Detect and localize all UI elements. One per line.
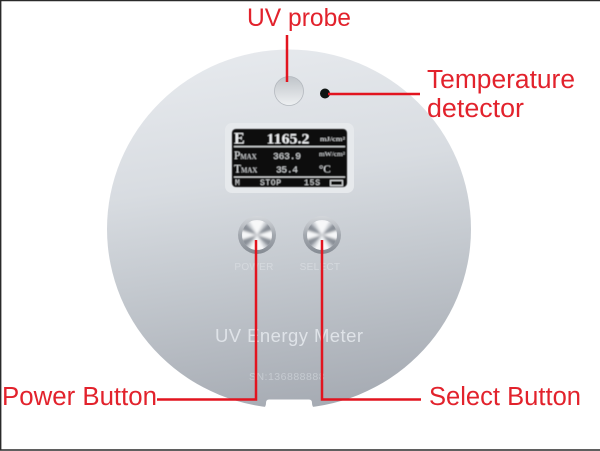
energy reading — [234, 130, 345, 148]
peak power reading: PMAX — [234, 150, 257, 162]
power button — [238, 220, 276, 254]
callout: temperature detector — [328, 66, 575, 123]
callout: temperature detector: Temperature — [427, 66, 575, 94]
select button — [303, 220, 341, 254]
callout: UV probe: UV probe — [247, 4, 351, 32]
device body — [107, 50, 471, 412]
peak power reading: 363.9 — [273, 151, 301, 162]
select label: SELECT — [300, 262, 340, 273]
callout: select button: Select Button — [429, 383, 581, 411]
status bar — [235, 179, 342, 188]
callout: UV probe — [247, 4, 351, 82]
callout: power button: Power Button — [2, 383, 157, 411]
callout: select button — [322, 240, 581, 411]
screen bezel — [225, 123, 354, 193]
power label: POWER — [234, 262, 274, 273]
callout: temperature detector: detector — [427, 95, 525, 123]
temperature reading — [234, 164, 331, 176]
energy reading: mJ/cm² — [320, 136, 345, 143]
energy reading: 1165.2 — [266, 132, 310, 148]
UV probe opening — [274, 76, 304, 106]
bottom notch — [262, 400, 317, 412]
serial number: SN:136888888 — [249, 371, 325, 383]
status bar: M — [235, 179, 240, 188]
OLED display — [232, 129, 347, 188]
temperature sensor — [320, 88, 330, 98]
status bar: STOP — [260, 179, 281, 188]
product name: UV Energy Meter — [215, 325, 363, 346]
callout: power button — [2, 240, 256, 411]
peak power reading: mW/cm² — [319, 151, 345, 158]
peak power reading — [234, 150, 345, 162]
energy reading: E — [234, 130, 245, 148]
status bar: 15S — [304, 179, 320, 188]
temperature reading: TMAX — [234, 164, 257, 176]
temperature reading: 35.4 — [276, 164, 298, 176]
battery icon — [330, 180, 342, 186]
temperature reading: °C — [319, 164, 331, 176]
